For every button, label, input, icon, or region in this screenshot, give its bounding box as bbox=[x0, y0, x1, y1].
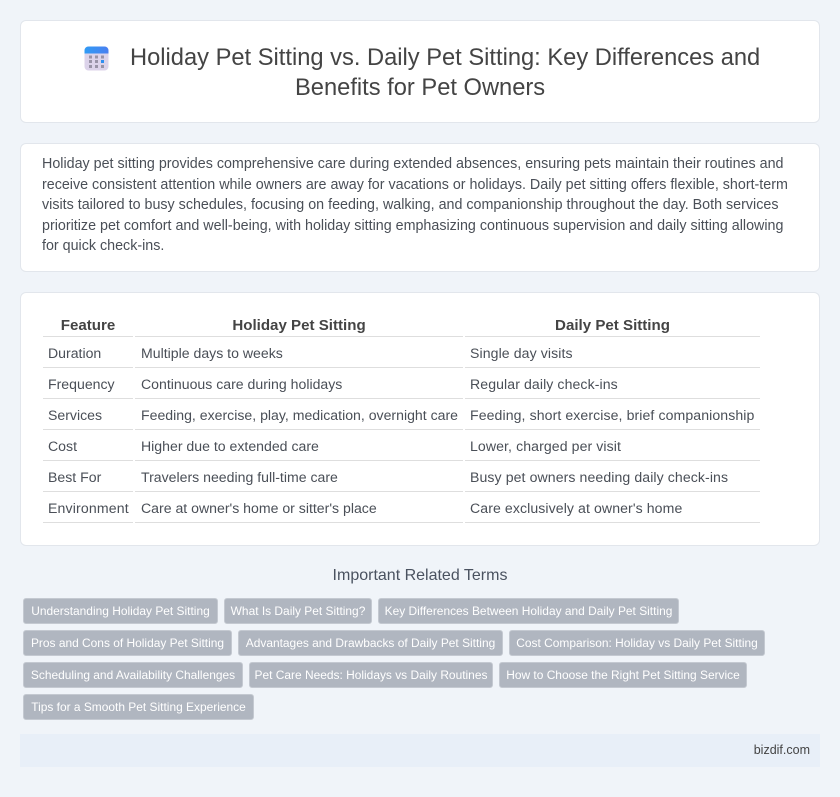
tag: Advantages and Drawbacks of Daily Pet Sitting bbox=[246, 636, 495, 650]
footer bbox=[20, 734, 820, 767]
row: frequency: Continuous care during holidays bbox=[141, 376, 342, 392]
icon: calendar bbox=[84, 46, 108, 70]
panel: comparison table bbox=[20, 292, 820, 546]
text block: introduction: visits tailored to busy schedules, focusing on feeding, walking, and companionship throughout the day. Both services bbox=[42, 197, 778, 213]
row: environment: Care exclusively at owner's home bbox=[470, 500, 682, 516]
row: services: Services bbox=[48, 407, 102, 423]
row: environment: Care at owner's home or sitter's place bbox=[141, 500, 377, 516]
footer text: bizdif.com bbox=[754, 743, 810, 757]
panel: header bbox=[20, 20, 820, 123]
row: cost: Lower, charged per visit bbox=[470, 438, 621, 454]
row: duration: Single day visits bbox=[470, 345, 573, 361]
row: frequency: Regular daily check-ins bbox=[470, 376, 618, 392]
row: environment bbox=[48, 500, 682, 516]
tag bbox=[224, 598, 372, 624]
tag bbox=[23, 694, 254, 720]
row: services: Feeding, short exercise, brief companionship bbox=[470, 407, 754, 423]
row: environment: Environment bbox=[48, 500, 129, 516]
tag: Cost Comparison: Holiday vs Daily Pet Sitting bbox=[516, 636, 758, 650]
table header bbox=[61, 317, 670, 334]
row: frequency bbox=[48, 376, 618, 392]
panel: introduction bbox=[20, 143, 820, 272]
row: best for: Travelers needing full-time care bbox=[141, 469, 338, 485]
text block: introduction bbox=[42, 156, 788, 254]
row: best for: Best For bbox=[48, 469, 101, 485]
title: Benefits for Pet Owners bbox=[295, 75, 545, 101]
row: cost: Higher due to extended care bbox=[141, 438, 319, 454]
text block: introduction: prioritize pet comfort and well-being, with holiday sitting emphasizing continuous supervision and daily sitting allowing bbox=[42, 218, 783, 234]
tag: Key Differences Between Holiday and Daily Pet Sitting bbox=[385, 604, 672, 618]
title bbox=[130, 45, 760, 101]
row: duration: Multiple days to weeks bbox=[141, 345, 283, 361]
tag: Scheduling and Availability Challenges bbox=[31, 668, 235, 682]
tag bbox=[238, 630, 503, 656]
row: services bbox=[48, 407, 754, 423]
row: duration: Duration bbox=[48, 345, 101, 361]
tag bbox=[23, 598, 218, 624]
tag: Pros and Cons of Holiday Pet Sitting bbox=[31, 636, 224, 650]
tag: How to Choose the Right Pet Sitting Service bbox=[506, 668, 740, 682]
table header: Holiday Pet Sitting bbox=[232, 317, 366, 334]
tag: Understanding Holiday Pet Sitting bbox=[31, 604, 210, 618]
heading: important related terms: Important Related Terms bbox=[333, 567, 507, 584]
row: cost: Cost bbox=[48, 438, 77, 454]
row: services: Feeding, exercise, play, medication, overnight care bbox=[141, 407, 458, 423]
related terms tags bbox=[23, 598, 765, 720]
text block: introduction: receive consistent attention while owners are away for vacations or holidays. Daily pet sitting offers flexible, short-term bbox=[42, 177, 788, 193]
tag: Tips for a Smooth Pet Sitting Experience bbox=[31, 700, 246, 714]
tag bbox=[249, 662, 493, 688]
tag bbox=[23, 662, 243, 688]
title: Holiday Pet Sitting vs. Daily Pet Sitting: Key Differences and bbox=[130, 45, 760, 71]
row: best for: Busy pet owners needing daily check-ins bbox=[470, 469, 728, 485]
row: best for bbox=[48, 469, 728, 485]
tag bbox=[499, 662, 747, 688]
row: frequency: Frequency bbox=[48, 376, 115, 392]
tag: Pet Care Needs: Holidays vs Daily Routines bbox=[255, 668, 487, 682]
tag bbox=[23, 630, 232, 656]
table header: Feature bbox=[61, 317, 115, 334]
row: cost bbox=[48, 438, 621, 454]
tag: What Is Daily Pet Sitting? bbox=[231, 604, 365, 618]
text block: introduction: for quick check-ins. bbox=[42, 238, 164, 254]
tag bbox=[378, 598, 679, 624]
row: duration bbox=[48, 345, 573, 361]
tag bbox=[509, 630, 765, 656]
text block: introduction: Holiday pet sitting provides comprehensive care during extended absences, ensuring pets maintain their routines and bbox=[42, 156, 784, 172]
table header: Daily Pet Sitting bbox=[555, 317, 670, 334]
